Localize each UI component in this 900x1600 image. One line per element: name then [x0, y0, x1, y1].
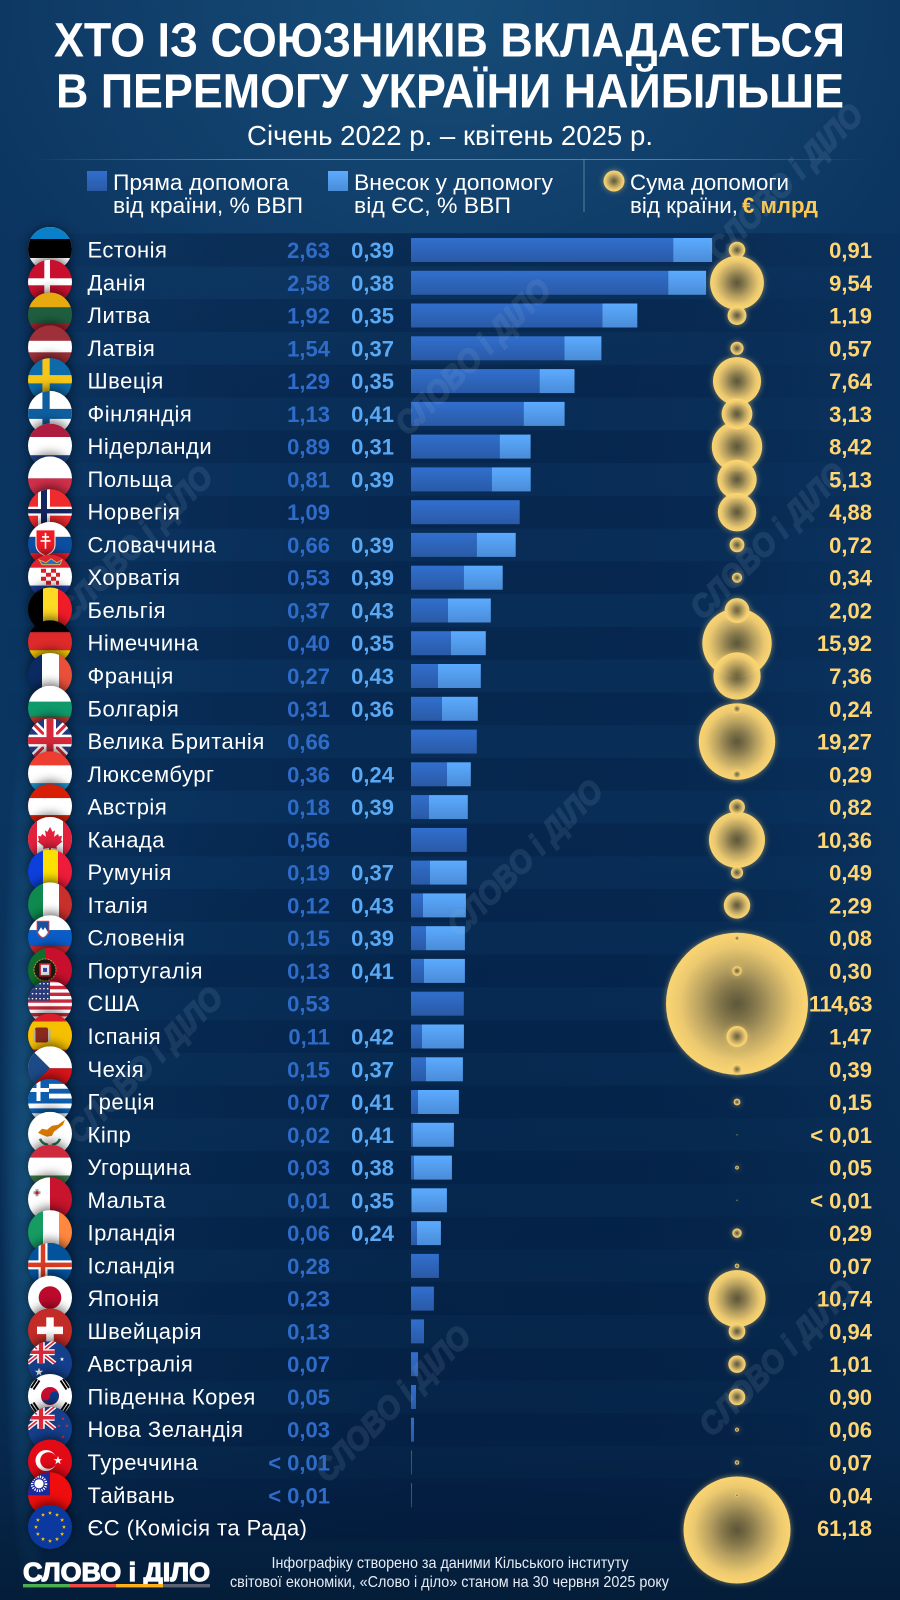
total aid values: 0,94	[829, 1319, 873, 1344]
country names: Португалія	[88, 958, 203, 983]
bar: Хорватія	[411, 566, 503, 590]
bar: Литва	[411, 304, 637, 328]
legend: direct aid: Пряма допомога	[113, 170, 290, 195]
country names: Фінляндія	[88, 401, 192, 426]
direct aid values	[268, 238, 331, 1508]
bar: Нова Зеландія	[411, 1418, 414, 1442]
direct aid values: 0,53	[287, 566, 330, 591]
EU contribution values: 0,38	[351, 271, 394, 296]
flag: Німеччина	[28, 617, 72, 664]
title: ХТО ІЗ СОЮЗНИКІВ ВКЛАДАЄТЬСЯ	[54, 14, 845, 68]
direct aid values: 0,05	[287, 1385, 330, 1410]
direct aid values: 0,40	[287, 631, 330, 656]
watermarks	[49, 96, 870, 1489]
source note: Інфографіку створено за даними Кільського інституту	[272, 1555, 628, 1572]
country names: Канада	[88, 827, 165, 852]
country names: Чехія	[88, 1057, 144, 1082]
total aid values: 3,13	[829, 402, 872, 427]
source note: світової економіки, «Слово і діло» станом на 30 червня 2025 року	[230, 1574, 669, 1591]
bar: Фінляндія	[411, 402, 565, 426]
country names: Німеччина	[88, 631, 199, 656]
bar: Австрія	[411, 795, 468, 819]
direct aid values: 0,89	[287, 435, 330, 460]
total aid values: 0,07	[829, 1254, 872, 1279]
total aid values	[809, 238, 873, 1541]
direct aid values: 0,23	[287, 1287, 330, 1312]
country names: Болгарія	[88, 696, 179, 721]
direct aid values: 0,66	[287, 730, 330, 755]
legend: EU contribution: від ЄС, % ВВП	[354, 193, 511, 218]
total aid values: 0,04	[829, 1483, 873, 1508]
EU contribution values: 0,41	[351, 1123, 394, 1148]
direct aid values: 1,29	[287, 369, 330, 394]
total aid values: 2,02	[829, 598, 872, 624]
country names: Данія	[88, 270, 146, 295]
EU contribution values: 0,39	[351, 467, 394, 492]
flag: Люксембург	[28, 748, 72, 795]
country names: Кіпр	[88, 1122, 131, 1147]
flag: Кіпр	[28, 1109, 72, 1156]
direct aid values: 0,15	[287, 926, 330, 951]
total aid values: 10,36	[817, 828, 872, 853]
country names: Австралія	[88, 1352, 193, 1377]
country names: Франція	[88, 664, 174, 688]
EU contribution values: 0,39	[351, 566, 394, 591]
bar: Болгарія	[411, 697, 478, 721]
flag: Швеція	[28, 355, 72, 402]
direct aid values: 0,12	[287, 893, 330, 918]
total aid values: 4,88	[829, 500, 872, 525]
flag: Нідерланди	[28, 421, 72, 468]
flag: Південна Корея	[28, 1371, 72, 1418]
header divider lines	[30, 159, 870, 212]
total aid values: 8,42	[829, 435, 872, 460]
direct aid values: 1,92	[287, 304, 330, 328]
total aid values: 0,29	[829, 1221, 872, 1246]
bar: Італія	[411, 893, 466, 917]
flag: Норвегія	[28, 486, 72, 533]
bar: Люксембург	[411, 762, 471, 786]
flag: ЄС	[28, 1502, 72, 1549]
country names: Бельгія	[88, 598, 166, 623]
bar: Естонія	[411, 238, 712, 262]
bar: Угорщина	[411, 1156, 452, 1180]
EU contribution values: 0,39	[351, 795, 394, 820]
legend: total aid: € млрд	[742, 193, 818, 218]
direct aid values: 0,07	[287, 1352, 330, 1377]
country names: Австрія	[88, 795, 167, 820]
bar: Туреччина	[410, 1450, 413, 1474]
watermarks: СЛОВО і ДІЛО	[682, 455, 853, 626]
direct aid values: < 0,01	[268, 1483, 330, 1508]
flag: Туреччина	[28, 1436, 72, 1484]
direct aid values: 2,58	[287, 271, 330, 296]
bar chart	[411, 238, 712, 1507]
country names: Швейцарія	[88, 1319, 202, 1344]
flag: Мальта	[28, 1174, 72, 1221]
bar: Польща	[411, 467, 531, 491]
flag: Австрія	[28, 781, 72, 828]
legend: total aid	[604, 170, 818, 218]
total aid values: 10,74	[817, 1287, 873, 1312]
source note	[230, 1555, 669, 1591]
EU contribution values: 0,43	[351, 598, 394, 624]
bar: Японія	[411, 1287, 434, 1311]
country names: Словаччина	[88, 532, 217, 557]
direct aid values: 0,28	[287, 1254, 330, 1279]
EU contribution values: 0,31	[351, 435, 394, 460]
bar: Кіпр	[411, 1123, 454, 1147]
flag: Італія	[28, 879, 72, 926]
total aid values: 0,30	[829, 959, 872, 984]
total aid values: 19,27	[817, 730, 872, 755]
total aid values: 0,08	[829, 926, 872, 951]
flag: Польща	[28, 453, 72, 500]
country names: Південна Корея	[88, 1384, 256, 1410]
total aid values: 7,64	[829, 369, 873, 394]
flag: Греція	[28, 1076, 72, 1123]
bar: Іспанія	[411, 1024, 464, 1048]
country names: Румунія	[88, 860, 172, 885]
total aid values: 1,01	[829, 1352, 872, 1377]
EU contribution values: 0,36	[351, 697, 394, 722]
EU contribution values: 0,39	[351, 533, 394, 558]
total aid values: 15,92	[817, 631, 872, 656]
legend: EU contribution: Внесок у допомогу	[354, 170, 553, 195]
watermarks: СЛОВО і ДІЛО	[49, 458, 220, 629]
total aid values: 5,13	[829, 467, 872, 492]
direct aid values: 0,06	[287, 1221, 330, 1246]
flag: Чехія	[28, 1043, 72, 1090]
direct aid values: 0,56	[287, 828, 330, 853]
EU contribution values: 0,42	[351, 1024, 394, 1050]
bar: Мальта	[411, 1188, 447, 1212]
direct aid values: 0,11	[288, 1024, 330, 1050]
EU contribution values: 0,43	[351, 893, 394, 918]
country names: Словенія	[88, 926, 185, 951]
bar: Норвегія	[411, 500, 520, 524]
bar: Данія	[411, 271, 706, 295]
bar: Німеччина	[411, 631, 486, 655]
total aid values: 9,54	[829, 271, 873, 296]
flag: Іспанія	[28, 1010, 72, 1058]
EU contribution values: 0,41	[351, 959, 394, 984]
EU contribution values: 0,41	[351, 402, 394, 427]
direct aid values: 0,36	[287, 762, 330, 787]
EU contribution values: 0,35	[351, 1188, 394, 1213]
title	[54, 14, 845, 118]
flag: США	[28, 978, 72, 1025]
flag: Литва	[28, 290, 72, 336]
flag: Канада	[28, 814, 72, 861]
total aid values: 1,47	[829, 1024, 872, 1050]
bar: США	[411, 992, 464, 1016]
bubble chart	[666, 242, 808, 1584]
total aid values: 0,05	[829, 1156, 872, 1181]
bar: Південна Корея	[411, 1385, 416, 1409]
country names: Люксембург	[88, 762, 215, 787]
country names: Угорщина	[88, 1155, 192, 1180]
flag: Естонія	[28, 227, 72, 271]
flag: Австралія	[27, 1338, 72, 1385]
total aid values: 0,24	[829, 697, 873, 722]
direct aid values: 0,18	[287, 795, 330, 820]
flag: Японія	[28, 1273, 72, 1320]
watermarks: СЛОВО і ДІЛО	[691, 1272, 862, 1443]
country names: Нова Зеландія	[88, 1417, 244, 1442]
bar: Греція	[411, 1090, 459, 1114]
flag: Латвія	[28, 322, 72, 369]
flag: Хорватія	[28, 552, 72, 599]
bar: Чехія	[411, 1057, 463, 1081]
country names: Норвегія	[88, 500, 180, 525]
total aid values: 0,91	[829, 238, 872, 263]
direct aid values: 0,03	[287, 1418, 330, 1443]
direct aid values: 0,13	[287, 1319, 330, 1344]
flag: Велика Британія	[28, 716, 72, 763]
country names: Ірландія	[88, 1221, 176, 1246]
EU contribution values: 0,24	[351, 762, 395, 787]
country names	[88, 238, 308, 1540]
direct aid values: 0,19	[287, 861, 330, 886]
country names: Польща	[88, 467, 173, 492]
title: В ПЕРЕМОГУ УКРАЇНИ НАЙБІЛЬШЕ	[56, 64, 844, 118]
EU contribution values: 0,43	[351, 664, 394, 689]
bar: Словенія	[411, 926, 465, 950]
total aid values: 0,72	[829, 533, 872, 558]
country names: Латвія	[88, 336, 155, 361]
EU contribution values: 0,41	[351, 1090, 394, 1115]
total aid values: 0,49	[829, 861, 872, 886]
legend: total aid: Сума допомоги	[630, 170, 789, 195]
flag: Франція	[28, 650, 72, 697]
country names: Італія	[88, 893, 148, 918]
country names: Естонія	[88, 238, 167, 262]
total aid values: 0,90	[829, 1385, 872, 1410]
country names: Японія	[88, 1286, 160, 1311]
country names: Нідерланди	[88, 434, 212, 459]
legend: total aid: від країни,	[630, 193, 738, 218]
direct aid values: 0,37	[287, 598, 330, 624]
direct aid values: 0,02	[287, 1123, 330, 1148]
legend: EU contribution	[328, 170, 553, 218]
direct aid values: 0,01	[287, 1188, 330, 1213]
total aid values: 1,19	[829, 304, 872, 328]
flag: Португалія	[28, 945, 72, 992]
EU contribution values: 0,35	[351, 304, 394, 328]
bar: Тайвань	[410, 1483, 413, 1507]
bar: Нідерланди	[411, 435, 531, 459]
country names: Мальта	[88, 1188, 166, 1213]
country names: ЄС (Комісія та Рада)	[88, 1516, 308, 1540]
country names: Швеція	[88, 369, 164, 394]
total aid values: 2,29	[829, 893, 872, 918]
direct aid values: 0,15	[287, 1057, 330, 1082]
bar: Велика Британія	[411, 730, 477, 754]
bar: Канада	[411, 828, 467, 852]
direct aid values: 0,31	[287, 697, 330, 722]
country names: Туреччина	[88, 1450, 199, 1475]
country names: Литва	[88, 303, 151, 328]
flag: Нова Зеландія	[27, 1404, 72, 1451]
EU contribution values: 0,38	[351, 1156, 394, 1181]
subtitle: Січень 2022 р. – квітень 2025 р.	[247, 120, 653, 151]
logo: СЛОВО і ДІЛО	[23, 1557, 210, 1587]
flag: Бельгія	[28, 584, 72, 632]
direct aid values: 1,54	[287, 336, 331, 361]
direct aid values: 0,27	[287, 664, 330, 689]
flag: Словаччина	[28, 519, 72, 566]
bar: Португалія	[411, 959, 465, 983]
direct aid values: < 0,01	[268, 1450, 330, 1476]
direct aid values: 0,13	[287, 959, 330, 984]
bar: Франція	[411, 664, 481, 688]
flag: Угорщина	[28, 1142, 72, 1189]
flag: Словенія	[28, 912, 72, 959]
direct aid values: 0,81	[287, 467, 330, 492]
total aid values: < 0,01	[810, 1188, 872, 1213]
total aid values: 0,57	[829, 336, 872, 361]
country names: США	[88, 991, 140, 1016]
bar: Швейцарія	[411, 1319, 424, 1343]
country names: Велика Британія	[88, 729, 265, 754]
total aid values: 0,15	[829, 1090, 872, 1115]
watermarks: СЛОВО і ДІЛО	[387, 271, 558, 442]
bar: Румунія	[411, 861, 467, 885]
country names: Хорватія	[88, 565, 180, 590]
flags column	[27, 227, 72, 1549]
total aid values: 0,39	[829, 1057, 872, 1082]
bar: Швеція	[411, 369, 574, 393]
EU contribution values: 0,24	[351, 1221, 395, 1246]
total aid values: 61,18	[817, 1516, 872, 1541]
direct aid values: 1,13	[287, 402, 330, 427]
EU contribution values	[351, 238, 395, 1246]
flag: Данія	[28, 257, 72, 304]
flag: Румунія	[28, 847, 72, 894]
bar: Ірландія	[411, 1221, 441, 1245]
total aid values: 114,63	[809, 992, 872, 1017]
watermarks: СЛОВО і ДІЛО	[699, 96, 870, 267]
flag: Ісландія	[28, 1240, 72, 1287]
bar: Ісландія	[411, 1254, 439, 1278]
direct aid values: 0,66	[287, 533, 330, 558]
direct aid values: 0,53	[287, 992, 330, 1017]
bar: Латвія	[411, 336, 601, 360]
flag: Тайвань	[28, 1469, 72, 1516]
flag: Болгарія	[28, 683, 72, 730]
total aid values: 0,29	[829, 762, 872, 787]
EU contribution values: 0,37	[351, 336, 394, 361]
legend: direct aid: від країни, % ВВП	[113, 193, 303, 218]
watermarks: СЛОВО і ДІЛО	[307, 1318, 478, 1489]
direct aid values: 0,03	[287, 1156, 330, 1181]
flag: Фінляндія	[28, 388, 72, 435]
total aid values: 7,36	[829, 664, 872, 689]
bar: Словаччина	[411, 533, 516, 557]
country names: Іспанія	[88, 1024, 161, 1049]
bar: Бельгія	[411, 598, 491, 622]
total aid values: 0,34	[829, 566, 873, 591]
total aid values: 0,07	[829, 1450, 872, 1476]
total aid values: < 0,01	[810, 1123, 872, 1148]
bar: Австралія	[411, 1352, 418, 1376]
EU contribution values: 0,35	[351, 369, 394, 394]
country names: Греція	[88, 1090, 155, 1114]
EU contribution values: 0,35	[351, 631, 394, 656]
total aid values: 0,06	[829, 1418, 872, 1443]
direct aid values: 1,09	[287, 500, 330, 525]
watermarks: СЛОВО і ДІЛО	[439, 772, 610, 943]
legend: direct aid	[87, 170, 303, 218]
flag: Ірландія	[28, 1207, 72, 1254]
flag: Швейцарія	[28, 1305, 72, 1352]
total aid values: 0,82	[829, 795, 872, 820]
EU contribution values: 0,39	[351, 926, 394, 951]
watermarks: СЛОВО і ДІЛО	[59, 979, 230, 1150]
EU contribution values: 0,39	[351, 238, 394, 263]
EU contribution values: 0,37	[351, 861, 394, 886]
EU contribution values: 0,37	[351, 1057, 394, 1082]
direct aid values: 0,07	[287, 1090, 330, 1115]
direct aid values: 2,63	[287, 238, 330, 263]
country names: Тайвань	[88, 1483, 175, 1508]
country names: Ісландія	[88, 1253, 175, 1278]
